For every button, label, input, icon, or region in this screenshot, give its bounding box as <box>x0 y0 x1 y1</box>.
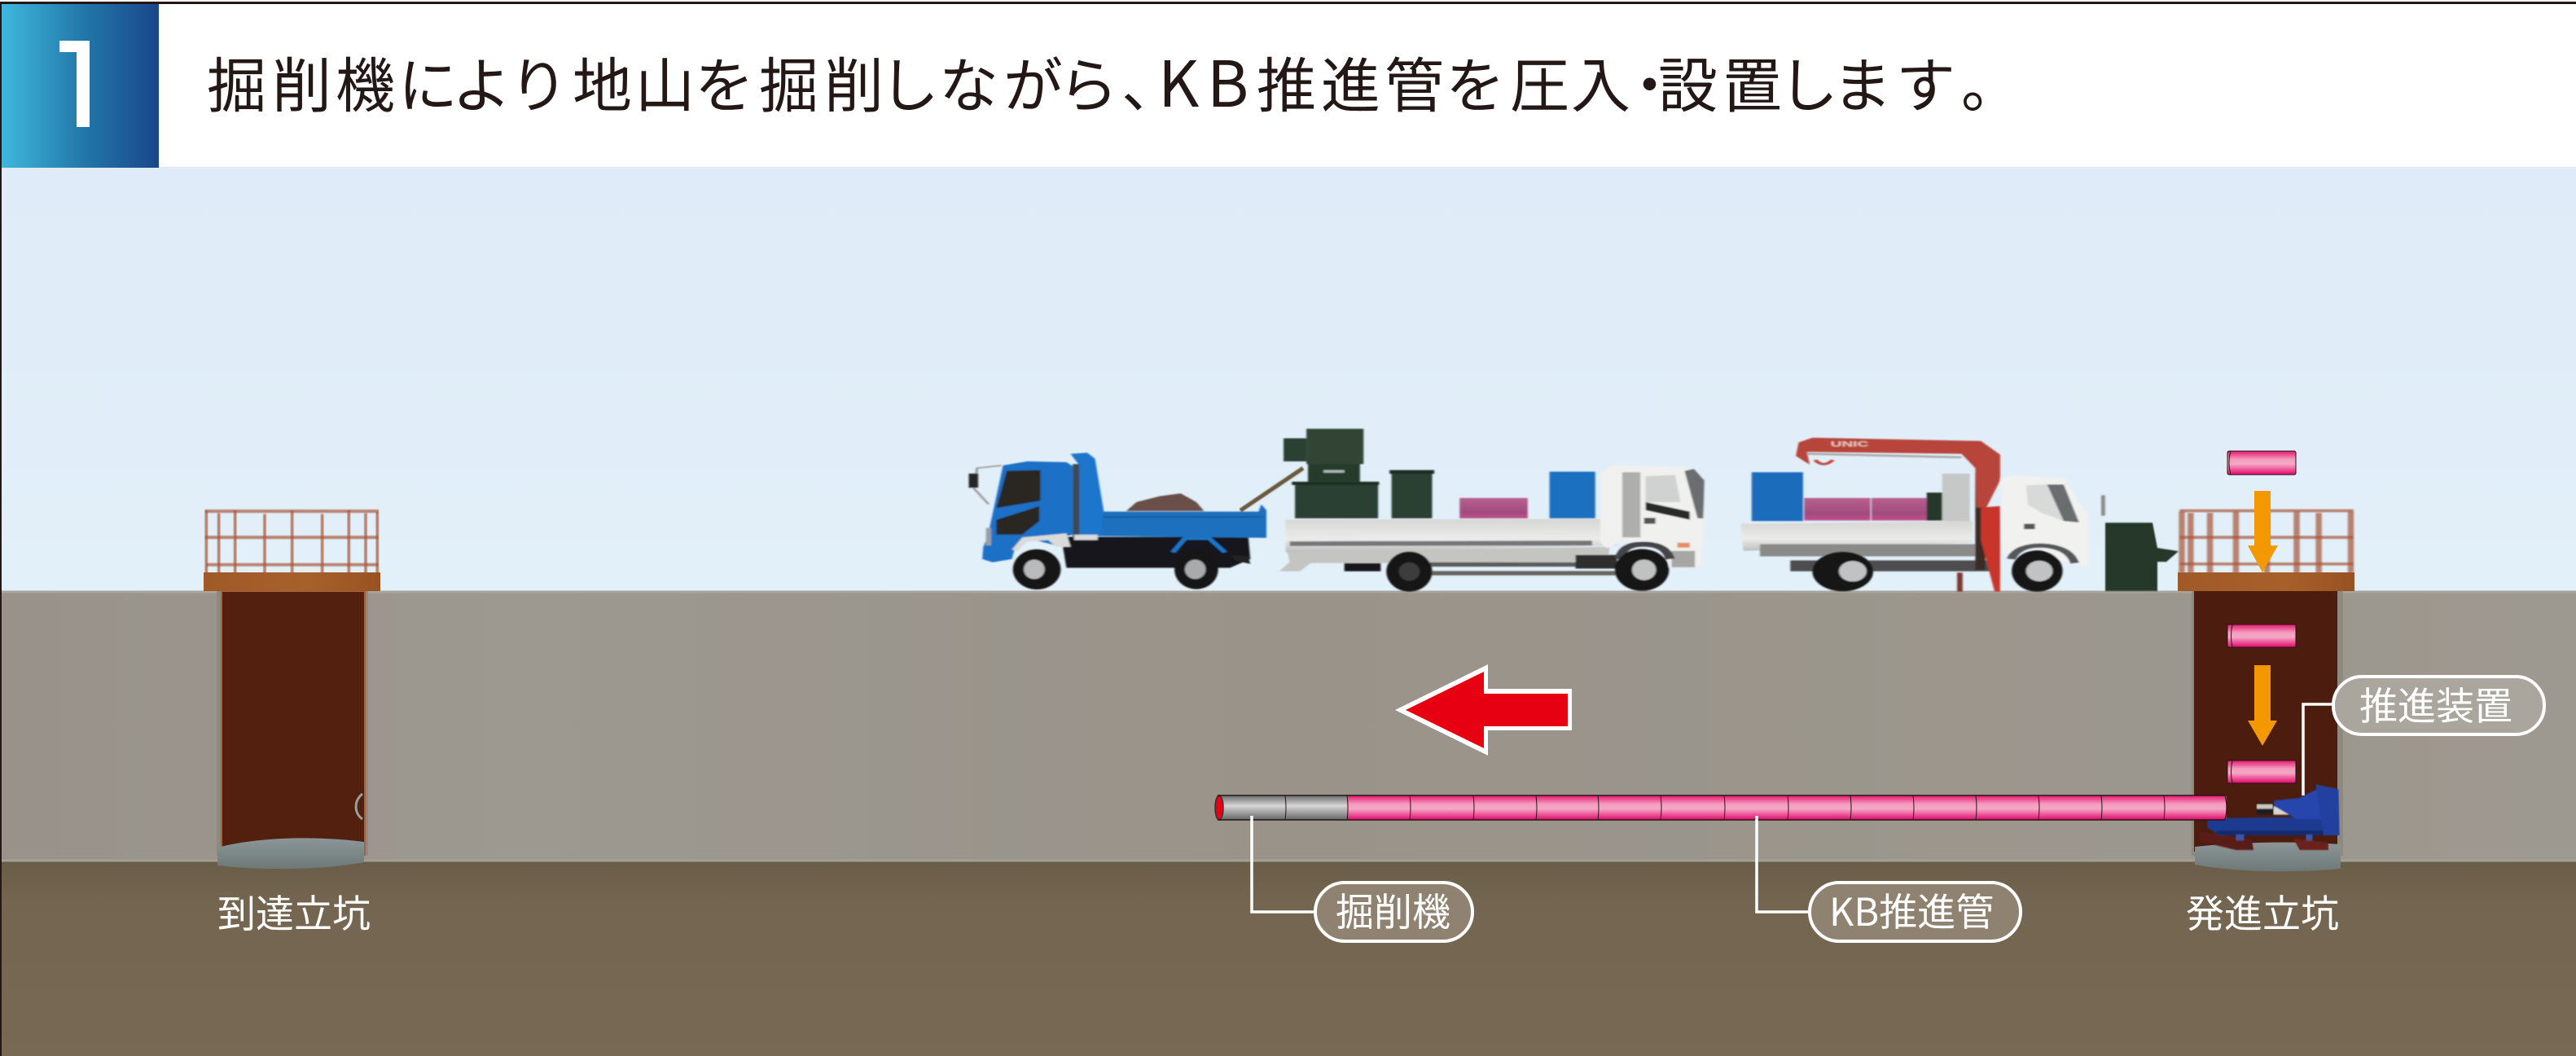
machine: pushing device <box>2200 784 2340 850</box>
label: launch shaft: 発進立坑 <box>2186 883 2339 939</box>
crane truck: UNIC <box>1831 440 1868 449</box>
soil layer <box>0 861 2576 1056</box>
pipe segment: being lowered <box>2227 451 2296 475</box>
crane truck <box>1740 438 2105 592</box>
wheels <box>1812 552 1873 591</box>
callout: KB pipe <box>1757 816 2021 941</box>
pipe segment: in shaft lower <box>2227 760 2296 783</box>
arrival shaft <box>204 510 380 869</box>
flatbed truck with machinery <box>1279 429 1705 592</box>
conveyor belt <box>1240 468 1303 510</box>
title: 掘削機により地山を掘削しながら、KB推進管を圧入・設置します。 <box>207 34 2021 125</box>
shaft floor disc <box>217 838 364 869</box>
callout: excavator <box>1252 816 1472 941</box>
platform <box>2178 572 2354 591</box>
arrow: orange down lower <box>2248 665 2277 746</box>
pipe segment: in shaft upper <box>2227 624 2296 647</box>
dump truck <box>969 453 1266 589</box>
arrow: red direction of advance <box>1395 664 1572 756</box>
step number badge <box>2 4 159 168</box>
label: arrival shaft: 到達立坑 <box>217 883 371 939</box>
launch shaft <box>2178 510 2354 871</box>
wheels <box>1013 550 1060 589</box>
shaft floor disc <box>2195 843 2341 871</box>
crane boom <box>1796 438 2000 507</box>
handle <box>356 794 362 819</box>
excavator head <box>1215 795 1348 820</box>
railing <box>2179 510 2354 572</box>
KB jacking pipe string <box>1215 795 2227 820</box>
wheels <box>1386 551 1432 592</box>
ground layer <box>0 591 2576 862</box>
pink pipes <box>1347 795 2227 820</box>
callout: excavator: 掘削機 <box>1336 881 1450 937</box>
railing <box>205 510 379 573</box>
platform <box>204 572 380 591</box>
callout: pushing device <box>2303 675 2544 795</box>
sky background <box>0 167 2576 592</box>
callout: pushing device: 推進装置 <box>2359 675 2512 731</box>
arrow: orange down upper <box>2248 491 2278 572</box>
generator box <box>2105 523 2179 591</box>
callout: KB pipe: KB推進管 <box>1829 881 1994 937</box>
